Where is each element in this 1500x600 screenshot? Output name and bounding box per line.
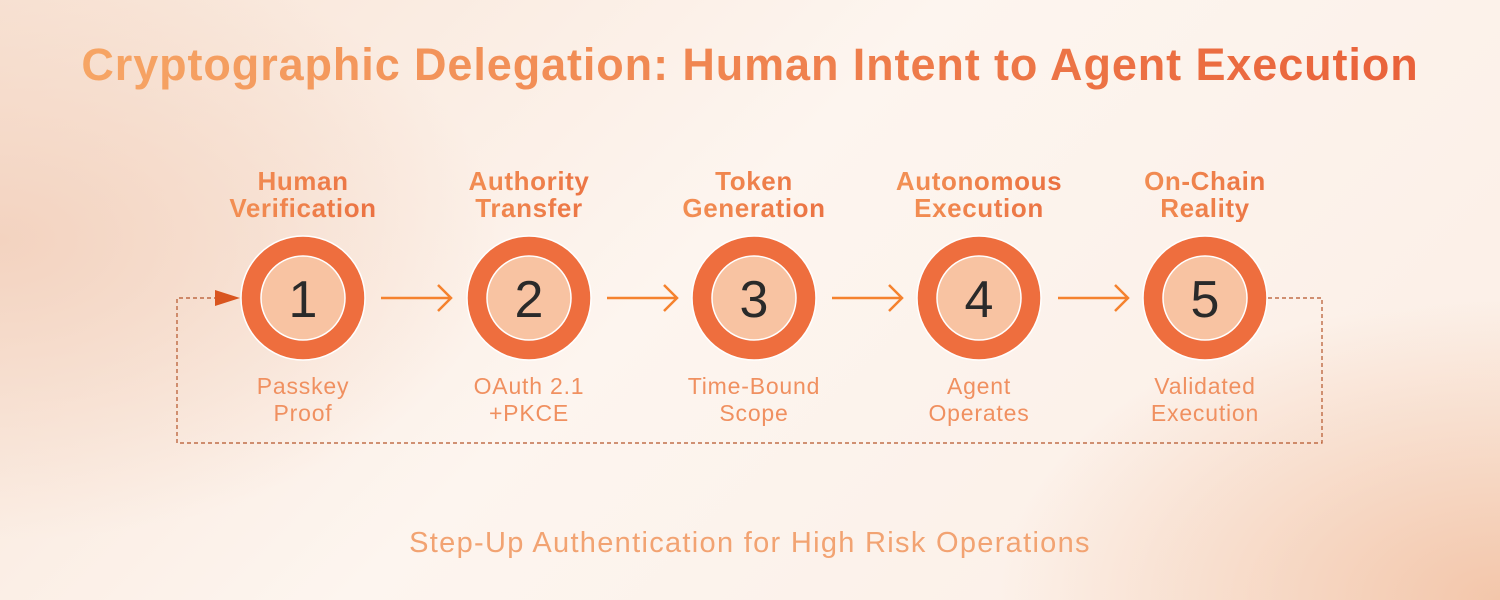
icon: arrowhead marker [215,290,240,306]
step 3 label [688,373,820,426]
title: Cryptographic Delegation: Human Intent to Agent Execution [81,39,1419,90]
step 5 label [1151,373,1259,426]
step circles: 3 [740,271,768,329]
step 1 label: Proof [274,400,332,426]
step 5 heading [1075,168,1335,222]
step circles: 4 [965,271,993,329]
step 4 heading: Execution [914,193,1044,223]
step 3 label: Scope [719,400,789,426]
step 5 label: Execution [1151,400,1259,426]
step circles [241,236,1267,360]
step 3 heading [624,168,884,222]
step 4 label [928,373,1030,426]
step 4 label: Agent [947,373,1011,399]
step 2 label: OAuth 2.1 [474,373,584,399]
step 2 heading [399,168,659,222]
step 2 label: +PKCE [489,400,569,426]
step 2 heading: Transfer [475,193,583,223]
footer caption: Step-Up Authentication for High Risk Operations [409,527,1091,559]
arrows between steps [381,285,1128,311]
step 5 heading: Reality [1160,193,1250,223]
step 3 heading: Token [715,166,793,196]
step 3 label: Time-Bound [688,373,820,399]
step 4 heading [849,168,1109,222]
step 5 label: Validated [1154,373,1256,399]
step 2 label [474,373,584,426]
step 1 heading [173,168,433,222]
step 1 label: Passkey [257,373,349,399]
step circles: 5 [1191,271,1219,329]
step 1 label [257,373,349,426]
loop-back dashed line [177,298,1322,443]
step 1 heading: Verification [229,193,377,223]
step 3 heading: Generation [682,193,826,223]
step 4 heading: Autonomous [896,166,1062,196]
step 5 heading: On-Chain [1144,166,1266,196]
step circles: 1 [289,271,317,329]
step 2 heading: Authority [469,166,589,196]
step 4 label: Operates [928,400,1030,426]
step 1 heading: Human [257,166,349,196]
step circles: 2 [515,271,543,329]
